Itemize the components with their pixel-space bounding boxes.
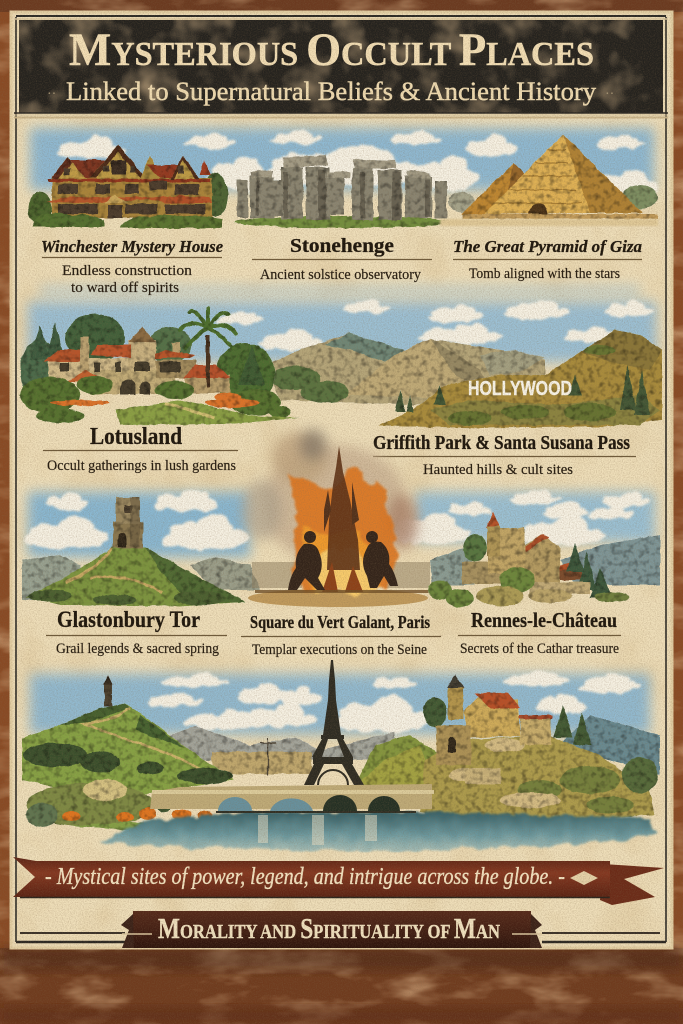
text: Griffith Park and Santa Susana Pass: Griffith Park & Santa Susana Pass [373, 432, 630, 454]
subtitle right dots: ·· [605, 87, 614, 102]
text: Glastonbury Tor [46, 607, 227, 657]
text: Great Pyramid of Giza [453, 237, 642, 282]
text: Square du Vert Galant, Paris [241, 612, 441, 658]
text: Stonehenge: Ancient solstice observatory [260, 267, 421, 283]
distant mountains and city [170, 726, 395, 775]
title: MYSTERIOUS OCCULT PLACES [69, 24, 594, 76]
illustration: Paris river landscape [22, 660, 660, 850]
burning spire [327, 446, 360, 570]
text: Lotusland: Lotusland [90, 424, 183, 450]
bridge [150, 784, 434, 813]
text: Great Pyramid of Giza: Tomb aligned with the stars [469, 266, 620, 282]
illustration: Griffith Park hills [378, 330, 662, 428]
text: Winchester Mystery House [41, 237, 223, 296]
sky washes [28, 128, 656, 734]
footer plaque [121, 911, 542, 948]
right hill [350, 674, 660, 825]
river reflections [258, 815, 377, 845]
illustration: burning pyre [242, 429, 430, 607]
text: Rennes-le-Château [458, 608, 621, 657]
ribbon banner [13, 857, 664, 905]
text: Square du Vert Galant, Paris: Templar executions on the Seine [252, 642, 427, 658]
left hill [22, 675, 235, 832]
illustration: distant mountains [265, 333, 545, 410]
subtitle: Linked to Supernatural Beliefs & Ancient History [66, 77, 596, 106]
illustration: Glastonbury Tor [22, 497, 260, 606]
text: Rennes-le-Château: Rennes-le-Château [471, 608, 617, 632]
text: Winchester Mystery House: to ward off spirits [71, 280, 179, 296]
text: Lotusland [43, 424, 238, 474]
text: Griffith Park and Santa Susana Pass: Haunted hills & cult sites [423, 462, 573, 478]
text: Rennes-le-Château: Secrets of the Cathar treasure [460, 641, 619, 657]
clouds [23, 130, 659, 732]
illustration: Great Pyramid of Giza [440, 134, 658, 226]
figure left [288, 531, 325, 590]
text: Square du Vert Galant, Paris: Square du Vert Galant, Paris [250, 612, 430, 632]
illustration: Stonehenge [234, 155, 450, 228]
illustration: Rennes-le-Château [428, 512, 660, 607]
Eiffel Tower [304, 660, 364, 785]
text: Glastonbury Tor: Glastonbury Tor [57, 607, 200, 632]
illustration: Lotusland [20, 308, 300, 425]
smoke [242, 429, 418, 565]
figure right [363, 531, 398, 588]
text: Lotusland: Occult gatherings in lush gardens [47, 458, 236, 474]
ribbon diamond ornament [570, 871, 598, 885]
illustration: Winchester Mystery House [28, 145, 228, 228]
ribbon caption: - Mystical sites of power, legend, and intrigue across the globe. - [45, 864, 565, 890]
subtitle left dots: ·· [47, 87, 56, 102]
text: Winchester Mystery House: Endless construction [62, 263, 193, 279]
river Seine [100, 812, 655, 850]
text: Stonehenge [252, 235, 432, 283]
text: Glastonbury Tor: Grail legends & sacred spring [56, 641, 219, 657]
text: Stonehenge: Stonehenge [290, 235, 394, 257]
text: Griffith Park and Santa Susana Pass [373, 432, 636, 478]
flames [286, 466, 395, 592]
Hollywood sign: HOLLYWOOD [468, 378, 572, 400]
header banner [19, 20, 663, 113]
text: Winchester Mystery House: Winchester Mystery House [41, 237, 223, 256]
text: Great Pyramid of Giza: The Great Pyramid of Giza [453, 237, 642, 256]
footer text: MORALITY AND SPIRITUALITY OF MAN [158, 914, 500, 945]
